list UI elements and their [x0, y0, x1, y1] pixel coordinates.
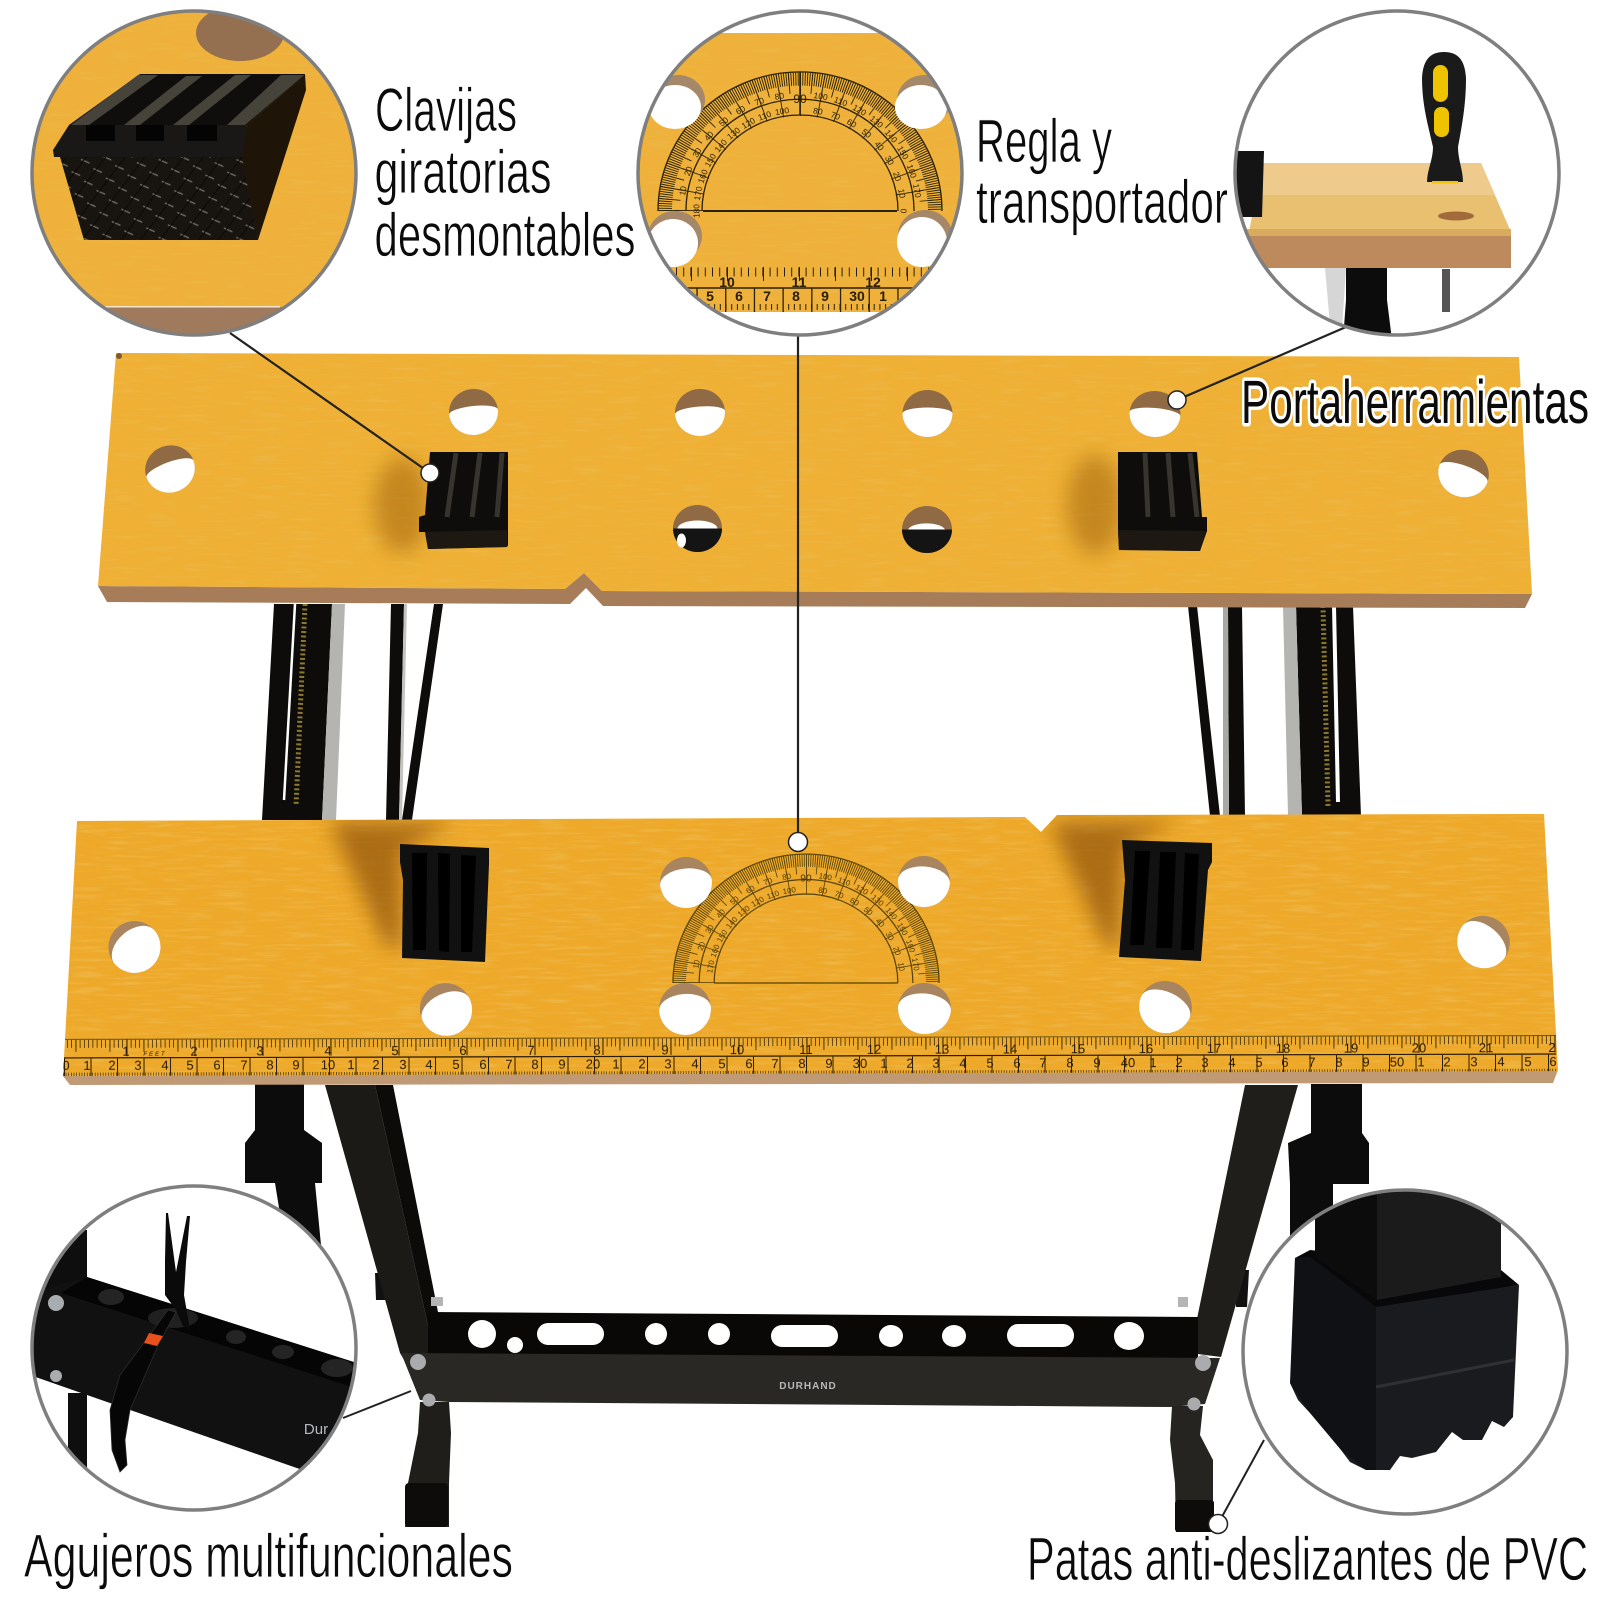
ruler — [639, 272, 960, 307]
centimetre numbers: 9 — [1093, 1055, 1101, 1070]
protractor numbers: 170 — [911, 183, 923, 199]
protractor numbers: 150 — [895, 144, 911, 161]
protractor numbers: 180 — [691, 204, 702, 218]
hole in board — [196, 14, 283, 61]
protractor — [658, 72, 942, 218]
detail circle: tool holder — [1235, 11, 1559, 340]
centimetre numbers: 10 — [321, 1057, 335, 1072]
marker dot: protractor — [788, 832, 808, 852]
inch numbers: 16 — [1139, 1041, 1153, 1056]
hole — [98, 910, 171, 984]
hole — [411, 974, 481, 1045]
hole — [896, 854, 952, 909]
hole — [138, 438, 202, 500]
wood background — [30, 8, 360, 308]
hole — [673, 387, 727, 438]
hole — [1432, 443, 1495, 504]
rubber foot shading — [1290, 1257, 1376, 1470]
protractor numbers: 80 — [774, 90, 785, 102]
protractor on board: 10 — [896, 962, 907, 972]
protractor numbers: 30 — [883, 154, 897, 167]
board ruler strip — [1240, 229, 1511, 236]
peg shadows — [374, 455, 1123, 555]
peg textured face — [60, 157, 258, 240]
centimetre numbers: 4 — [425, 1057, 433, 1072]
detail circle: ruler and protractor — [636, 11, 966, 335]
peg right side — [240, 74, 306, 240]
protractor on board: 120 — [854, 883, 870, 897]
inch numbers: 15 — [1071, 1041, 1085, 1056]
label: removable swivel pegs: giratorias — [374, 138, 552, 206]
logo: Dur — [304, 1421, 328, 1438]
inch numbers: 2 — [1548, 1040, 1556, 1055]
inch numbers: 10 — [730, 1042, 744, 1057]
label: ruler and protractor — [976, 107, 1228, 236]
left peg — [419, 452, 508, 549]
centimetre numbers: 6 — [1013, 1055, 1021, 1070]
black peg — [1236, 151, 1264, 217]
centimetre numbers: 8 — [1066, 1055, 1074, 1070]
protractor on board: 60 — [744, 883, 757, 896]
centimetre numbers: 7 — [505, 1057, 513, 1072]
protractor on board: 80 — [782, 872, 792, 882]
square tube — [1315, 1180, 1377, 1300]
detail circle: removable swivel pegs — [30, 5, 360, 339]
peg strips — [71, 75, 158, 125]
leg under board — [1344, 268, 1392, 334]
centimetre numbers: 8 — [531, 1057, 539, 1072]
centimetre numbers: 9 — [1362, 1055, 1370, 1070]
ruler: 11 — [792, 274, 807, 290]
protractor numbers: 60 — [845, 117, 859, 130]
ruler: 6 — [735, 288, 743, 304]
hole — [447, 387, 500, 437]
protractor on board: 160 — [709, 943, 722, 959]
rubber foot collar behind tube — [1295, 1250, 1519, 1310]
protractor numbers: 170 — [692, 185, 704, 201]
centimetre numbers: 50 — [1390, 1054, 1404, 1069]
protractor on board: 70 — [833, 889, 845, 901]
ruler: 10 — [719, 274, 735, 290]
right clamp — [1288, 1084, 1369, 1260]
protractor numbers: 100 — [813, 90, 829, 102]
centimetre numbers: 1 — [1149, 1055, 1157, 1070]
marker dot: feet — [1208, 1514, 1228, 1534]
hole — [1446, 905, 1521, 979]
protractor on board: 110 — [837, 875, 852, 888]
inch numbers: 11 — [799, 1042, 813, 1057]
label: removable swivel pegs: desmontables — [374, 201, 636, 269]
peg lip slots — [86, 125, 115, 141]
centimetre numbers: 8 — [1335, 1055, 1343, 1070]
beam top flange — [61, 1277, 360, 1387]
centimetre numbers: 4 — [691, 1056, 699, 1071]
protractor numbers: 120 — [740, 115, 757, 131]
leader line: pegs — [230, 333, 430, 473]
protractor numbers: 20 — [891, 170, 904, 183]
centimetre numbers: 3 — [399, 1057, 407, 1072]
centimetre numbers: 20 — [586, 1057, 600, 1072]
protractor on board: 150 — [715, 928, 730, 944]
lower bench board with ruler — [58, 814, 1558, 1085]
wood background — [636, 33, 966, 312]
inch numbers: 1 — [122, 1044, 130, 1059]
centimetre numbers: 3 — [1470, 1054, 1478, 1069]
centimetre numbers: 40 — [1121, 1055, 1135, 1070]
protractor numbers: 110 — [833, 94, 849, 108]
protractor on board: 20 — [696, 940, 708, 952]
crossbar front panel — [401, 1353, 1220, 1407]
protractor on board: 60 — [848, 896, 861, 908]
protractor on board: 90 — [800, 873, 812, 884]
protractor on board — [673, 854, 939, 983]
protractor numbers: 10 — [896, 188, 908, 199]
protractor numbers: 130 — [868, 113, 885, 130]
centimetre numbers: 6 — [213, 1058, 221, 1073]
inch numbers — [123, 1042, 1554, 1056]
hole with frame behind — [673, 505, 722, 552]
ruler: 12 — [865, 274, 881, 290]
screwdriver yellow inserts — [1433, 65, 1448, 102]
screwdriver handle — [1422, 52, 1466, 182]
beam — [34, 1277, 354, 1469]
centimetre numbers: 6 — [479, 1057, 487, 1072]
hole with frame behind — [902, 506, 952, 553]
label: multifunction holes: Agujeros multifuncionales — [24, 1522, 513, 1590]
label: removable swivel pegs — [374, 76, 636, 269]
centimetre numbers: 8 — [266, 1057, 274, 1072]
inch numbers: 5 — [391, 1043, 399, 1058]
centimetre numbers: 6 — [1281, 1055, 1289, 1070]
protractor numbers: 140 — [883, 128, 900, 145]
centimetre numbers: 6 — [745, 1056, 753, 1071]
inch numbers: 17 — [1207, 1041, 1221, 1056]
hole — [657, 854, 715, 911]
protractor on board: 130 — [869, 893, 886, 908]
centimetre numbers: 9 — [558, 1057, 566, 1072]
inch numbers: 4 — [324, 1043, 332, 1058]
rubber foot — [1290, 1257, 1519, 1470]
protractor on board: 140 — [883, 906, 899, 922]
beam holes — [98, 1289, 124, 1305]
centimetre numbers: 8 — [798, 1056, 806, 1071]
protractor on board: 40 — [874, 917, 887, 929]
inch numbers: FEET — [143, 1052, 167, 1058]
protractor numbers: 70 — [829, 109, 842, 122]
screws — [410, 1354, 426, 1370]
protractor on board: 100 — [818, 871, 833, 882]
detail circle: PVC non-slip feet — [1243, 1180, 1567, 1514]
centimetre numbers — [63, 1056, 1556, 1070]
protractor numbers: 50 — [717, 115, 731, 128]
upper bench board — [98, 353, 1532, 608]
hole — [1128, 389, 1182, 439]
centimetre numbers: 2 — [1443, 1054, 1451, 1069]
centimetre numbers: 4 — [959, 1056, 967, 1071]
board top far half — [1258, 163, 1495, 195]
centimetre numbers: 2 — [372, 1057, 380, 1072]
protractor on board: 70 — [762, 876, 774, 887]
inch numbers: 9 — [661, 1042, 669, 1057]
board front edge — [98, 573, 1532, 608]
centimetre numbers: 5 — [986, 1055, 994, 1071]
inch numbers: 8 — [593, 1043, 601, 1058]
holes — [649, 75, 705, 129]
peg shadows — [330, 822, 1180, 950]
marker dot: pegs — [421, 464, 439, 482]
inch numbers: 21 — [1479, 1040, 1493, 1055]
bench frame: lower clamps, legs, crossbar and feet — [245, 1084, 1369, 1532]
protractor on board: 160 — [904, 939, 917, 954]
protractor numbers — [677, 90, 923, 218]
centimetre numbers: 3 — [932, 1056, 940, 1071]
centimetre numbers: 5 — [718, 1056, 726, 1071]
centimetre numbers: 4 — [1228, 1055, 1236, 1070]
protractor numbers: 120 — [851, 102, 868, 118]
right peg — [1119, 840, 1212, 961]
right A-leg — [1190, 1085, 1298, 1357]
ruler: 8 — [792, 288, 800, 304]
protractor numbers: 110 — [757, 109, 773, 123]
logo: DURHAND — [779, 1381, 837, 1392]
ruler: 7 — [763, 288, 771, 304]
centimetre numbers: 1 — [347, 1057, 355, 1072]
protractor numbers: 130 — [725, 125, 742, 142]
inch numbers: 18 — [1276, 1041, 1290, 1056]
centimetre numbers: 2 — [906, 1056, 914, 1071]
centimetre numbers: 5 — [186, 1058, 194, 1073]
peg top — [69, 74, 305, 125]
centimetre numbers: 4 — [1497, 1054, 1505, 1069]
inch numbers: 20 — [1412, 1040, 1426, 1055]
leader line: ruler and protractor — [797, 336, 799, 842]
inch numbers: 6 — [459, 1043, 467, 1058]
protractor on board: 100 — [782, 885, 797, 896]
centimetre numbers: 2 — [1175, 1055, 1183, 1070]
peg lip — [53, 125, 247, 157]
centimetre numbers: 6 — [1549, 1054, 1557, 1069]
protractor numbers: 160 — [905, 163, 919, 180]
centimetre numbers: 5 — [1255, 1055, 1263, 1070]
board top surface — [63, 814, 1558, 1076]
crossbar back with holes — [428, 1312, 1198, 1361]
centimetre numbers: 2 — [638, 1056, 646, 1071]
protractor numbers: 150 — [702, 152, 718, 169]
board front edge — [63, 1070, 1558, 1085]
protractor on board: 110 — [765, 888, 781, 901]
centimetre numbers: 7 — [240, 1057, 248, 1072]
ruler: 5 — [706, 288, 714, 304]
board top surface — [98, 353, 1532, 594]
centimetre numbers: 7 — [1308, 1055, 1316, 1070]
detail circle: multifunction holes with pliers — [30, 1186, 360, 1510]
centimetre numbers: 1 — [880, 1056, 888, 1071]
board edge — [107, 307, 282, 334]
label: ruler and protractor: Regla y — [976, 107, 1112, 175]
leader line: multifunction holes — [343, 1391, 411, 1418]
inch numbers: 14 — [1003, 1041, 1017, 1056]
protractor numbers: 90 — [793, 92, 807, 106]
protractor on board: 20 — [891, 945, 903, 957]
centimetre numbers: 9 — [292, 1057, 300, 1072]
pliers handle — [110, 1310, 176, 1472]
right peg — [1118, 452, 1207, 551]
ruler — [58, 1036, 1557, 1075]
protractor numbers: 100 — [774, 105, 790, 117]
centimetre numbers: 4 — [161, 1058, 169, 1073]
protractor on board: 50 — [728, 894, 741, 907]
hole — [657, 981, 713, 1037]
centimetre numbers: 1 — [1417, 1054, 1425, 1069]
centimetre numbers: 7 — [1039, 1055, 1047, 1070]
protractor numbers: 20 — [682, 165, 695, 177]
protractor on board: 30 — [703, 923, 716, 935]
protractor on board: 120 — [750, 894, 766, 909]
screwdriver blade — [1442, 269, 1450, 312]
protractor on board: 10 — [691, 959, 702, 969]
hole — [902, 390, 952, 437]
protractor on board: 140 — [724, 915, 740, 931]
protractor numbers: 70 — [753, 95, 766, 108]
hole — [1130, 972, 1201, 1042]
screws — [48, 1295, 64, 1311]
protractor numbers: 50 — [860, 127, 874, 140]
label: ruler and protractor: transportador — [976, 168, 1228, 236]
protractor on board: 40 — [714, 907, 728, 920]
inch numbers: 2 — [190, 1044, 198, 1059]
centimetre numbers: 5 — [452, 1057, 460, 1072]
left foot — [405, 1402, 451, 1527]
centimetre numbers: 0 — [62, 1058, 70, 1073]
label: removable swivel pegs: Clavijas — [375, 76, 517, 144]
pliers jaws — [165, 1213, 190, 1330]
leader line: tool holder — [1177, 327, 1346, 400]
leader line: PVC feet — [1218, 1440, 1264, 1524]
protractor numbers: 0 — [898, 209, 909, 214]
protractor on board: 50 — [862, 905, 875, 918]
centimetre numbers: 1 — [612, 1056, 620, 1071]
inch numbers: 12 — [867, 1042, 881, 1057]
centimetre numbers: 5 — [1524, 1054, 1532, 1069]
inch numbers: 7 — [527, 1043, 535, 1058]
centimetre numbers: 9 — [825, 1056, 833, 1071]
centimetre numbers: 3 — [134, 1058, 142, 1073]
protractor on board: 170 — [705, 959, 717, 974]
ruler: 30 — [849, 288, 865, 304]
right foot — [1170, 1406, 1213, 1532]
hole — [896, 981, 953, 1036]
protractor numbers: 40 — [872, 139, 886, 153]
left A-leg — [325, 1085, 434, 1395]
bench frame: upper uprights and braces — [262, 604, 1361, 820]
ruler: 9 — [821, 288, 829, 304]
protractor on board: 130 — [736, 903, 752, 919]
centimetre numbers: 30 — [853, 1056, 867, 1071]
posts — [45, 1230, 87, 1289]
protractor on board: 80 — [818, 886, 829, 896]
inch numbers: 19 — [1344, 1041, 1358, 1056]
board front — [1240, 236, 1511, 268]
protractor numbers: 60 — [734, 103, 747, 117]
left peg — [400, 844, 489, 962]
hole in board — [1438, 212, 1474, 220]
centimetre numbers: 3 — [1201, 1055, 1209, 1070]
protractor numbers: 30 — [690, 146, 704, 159]
protractor on board: 170 — [910, 957, 921, 972]
inch numbers: 3 — [256, 1043, 264, 1058]
protractor on board: 30 — [884, 930, 896, 943]
protractor numbers: 140 — [712, 137, 729, 154]
centimetre numbers: 1 — [83, 1058, 91, 1073]
protractor numbers: 40 — [702, 129, 716, 143]
marker dot: tool holder — [1168, 391, 1186, 409]
protractor numbers: 160 — [696, 168, 710, 185]
left clamp — [245, 1084, 322, 1245]
ruler: 1 — [879, 288, 887, 304]
inch numbers: 13 — [935, 1042, 949, 1057]
protractor on board: 150 — [895, 921, 910, 937]
centimetre numbers: 3 — [664, 1056, 672, 1071]
pliers red grip — [144, 1333, 163, 1346]
centimetre numbers: 7 — [771, 1056, 779, 1071]
protractor numbers: 80 — [812, 105, 824, 117]
protractor numbers: 10 — [677, 185, 689, 196]
board top — [1249, 163, 1511, 232]
centimetre numbers: 2 — [108, 1058, 116, 1073]
